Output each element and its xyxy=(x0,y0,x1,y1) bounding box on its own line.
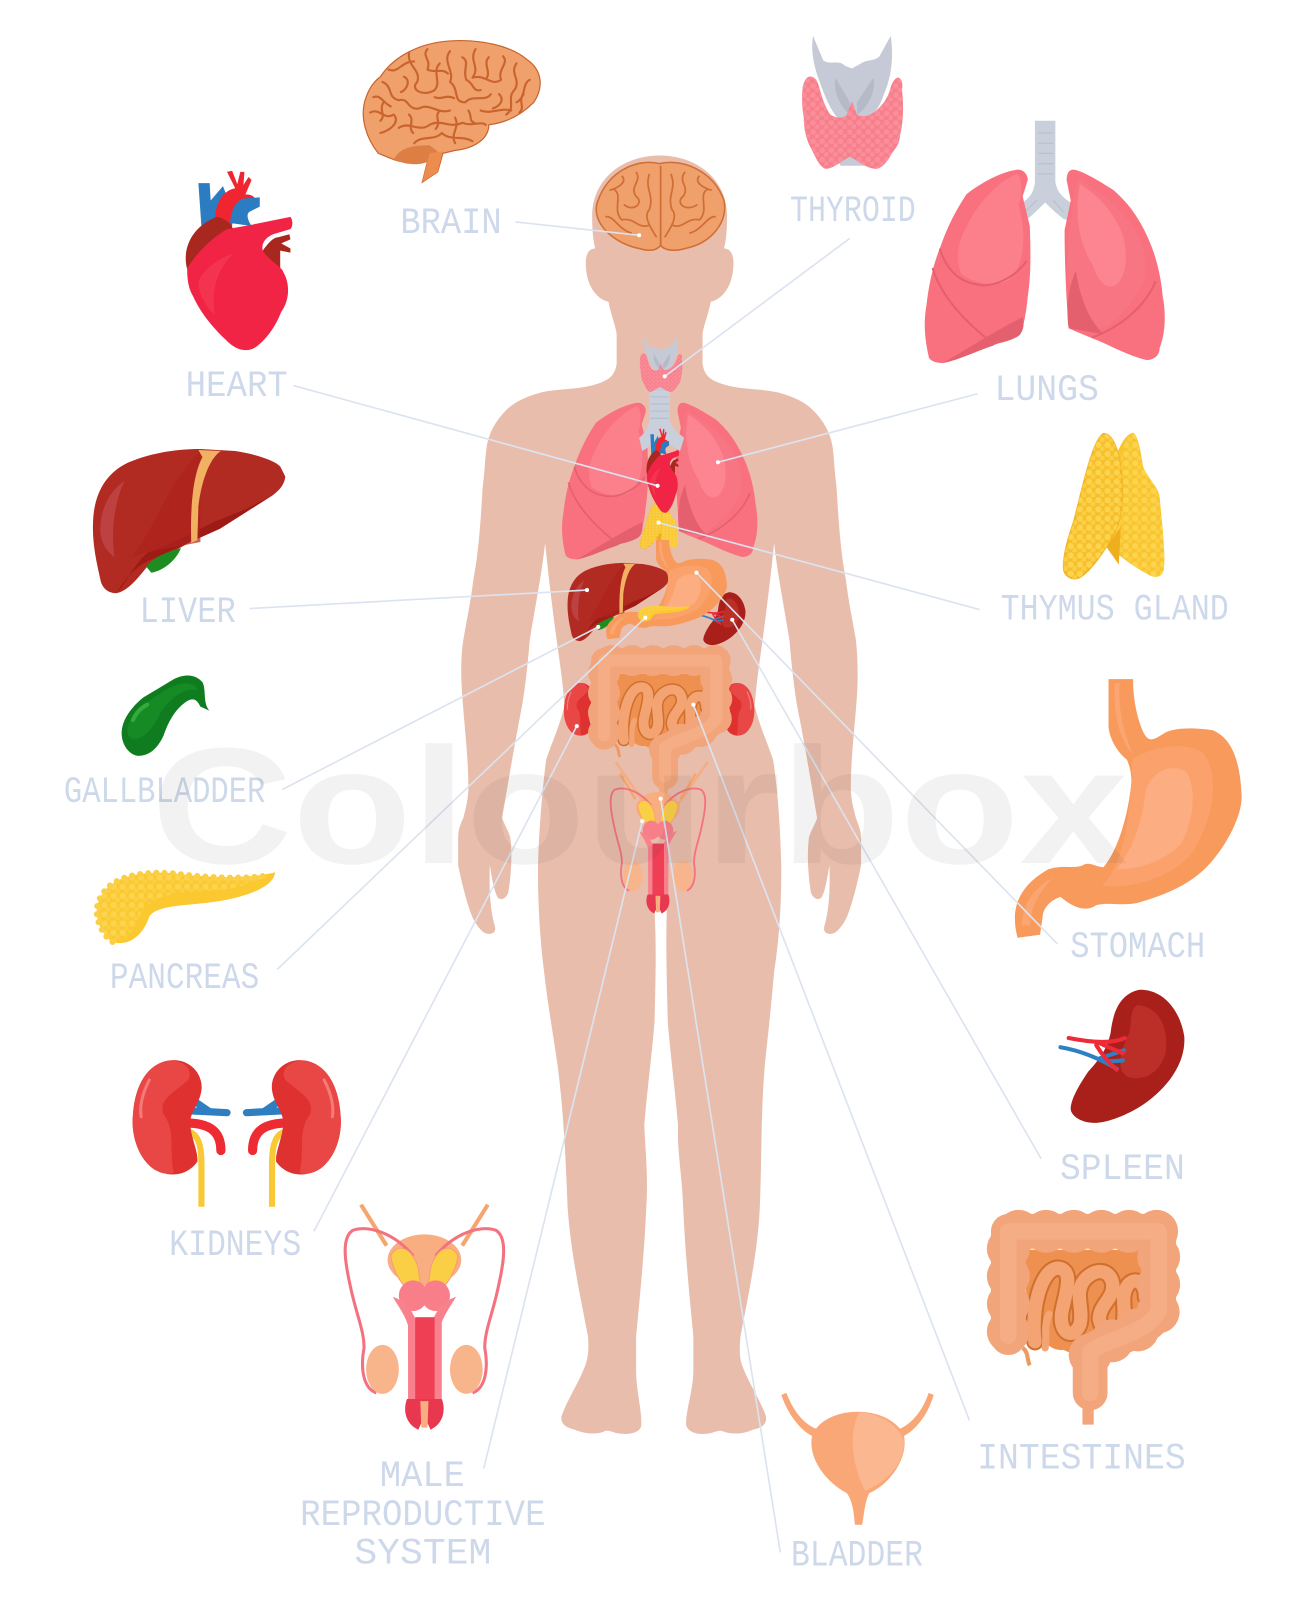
label: SPLEEN: SPLEEN xyxy=(1060,1149,1185,1191)
leader: intestines xyxy=(691,703,969,1420)
leader: pancreas xyxy=(277,616,647,970)
label: MALE REPRODUCTIVE SYSTEM xyxy=(300,1456,546,1576)
organ: lungs xyxy=(925,121,1165,363)
organ on body: thymus xyxy=(640,503,678,549)
organ on body: liver xyxy=(568,563,669,641)
label: MALE REPRODUCTIVE SYSTEM: REPRODUCTIVE xyxy=(300,1495,546,1537)
leader: brain xyxy=(515,222,641,237)
organ on body: stomach xyxy=(606,540,727,639)
organ on body: spleen xyxy=(700,592,745,645)
leader: lungs xyxy=(716,394,978,464)
organ on body: intestines xyxy=(604,661,716,800)
organ on body: kidneys xyxy=(564,683,754,736)
label: MALE REPRODUCTIVE SYSTEM: MALE xyxy=(380,1456,465,1498)
organ: stomach xyxy=(1015,679,1242,938)
label: GALLBLADDER: GALLBLADDER xyxy=(64,772,265,814)
label: KIDNEYS: KIDNEYS xyxy=(169,1225,301,1267)
leader: bladder xyxy=(659,797,780,1552)
organ: gallbladder xyxy=(122,675,210,756)
organ on body: heart xyxy=(647,429,679,513)
organ: bladder xyxy=(781,1393,934,1525)
leader lines xyxy=(250,222,1057,1552)
label: PANCREAS: PANCREAS xyxy=(110,958,259,1000)
organ: intestines xyxy=(1008,1231,1159,1425)
human body silhouette xyxy=(458,155,861,1434)
organ on body: pancreas xyxy=(638,606,690,621)
organ: brain xyxy=(363,41,540,182)
label: STOMACH: STOMACH xyxy=(1070,927,1205,969)
organ on body: vas deferens tubes xyxy=(616,762,708,806)
label: BLADDER: BLADDER xyxy=(791,1536,923,1578)
organ: pancreas xyxy=(97,872,275,943)
organ on body: lungs xyxy=(562,403,757,559)
organ on body: male reproductive system xyxy=(611,774,705,914)
organ: kidneys xyxy=(133,1060,341,1207)
organ on body: thyroid xyxy=(640,336,682,392)
organ: thymus gland xyxy=(1064,433,1164,579)
organ: male reproductive system xyxy=(345,1205,504,1430)
leader: thymus xyxy=(657,521,980,610)
organ labels xyxy=(64,191,1229,1578)
label: HEART: HEART xyxy=(186,366,288,408)
leader: heart xyxy=(294,386,660,488)
organ: thyroid xyxy=(802,36,903,169)
organ on body: brain xyxy=(596,162,725,250)
label: INTESTINES: INTESTINES xyxy=(977,1439,1186,1481)
label: MALE REPRODUCTIVE SYSTEM: SYSTEM xyxy=(354,1534,491,1576)
watermark: Colourbox xyxy=(151,714,1128,899)
leader: kidneys xyxy=(314,724,579,1231)
leader: male reproductive system xyxy=(484,819,644,1469)
organ: spleen xyxy=(1060,990,1184,1123)
label: THYMUS GLAND: THYMUS GLAND xyxy=(1001,590,1229,632)
organ: liver xyxy=(93,449,285,593)
leader: spleen xyxy=(730,618,1041,1159)
organ on body: trachea xyxy=(639,390,684,451)
leader: gallbladder xyxy=(282,625,600,790)
leader: stomach xyxy=(694,571,1057,944)
label: LUNGS: LUNGS xyxy=(995,370,1099,412)
organ: heart xyxy=(186,171,292,350)
leader: liver xyxy=(250,588,589,609)
label: BRAIN: BRAIN xyxy=(400,203,502,245)
leader: thyroid xyxy=(663,238,850,378)
internal organs on the body xyxy=(562,162,757,914)
label: THYROID: THYROID xyxy=(790,191,916,233)
label: LIVER: LIVER xyxy=(140,592,236,634)
